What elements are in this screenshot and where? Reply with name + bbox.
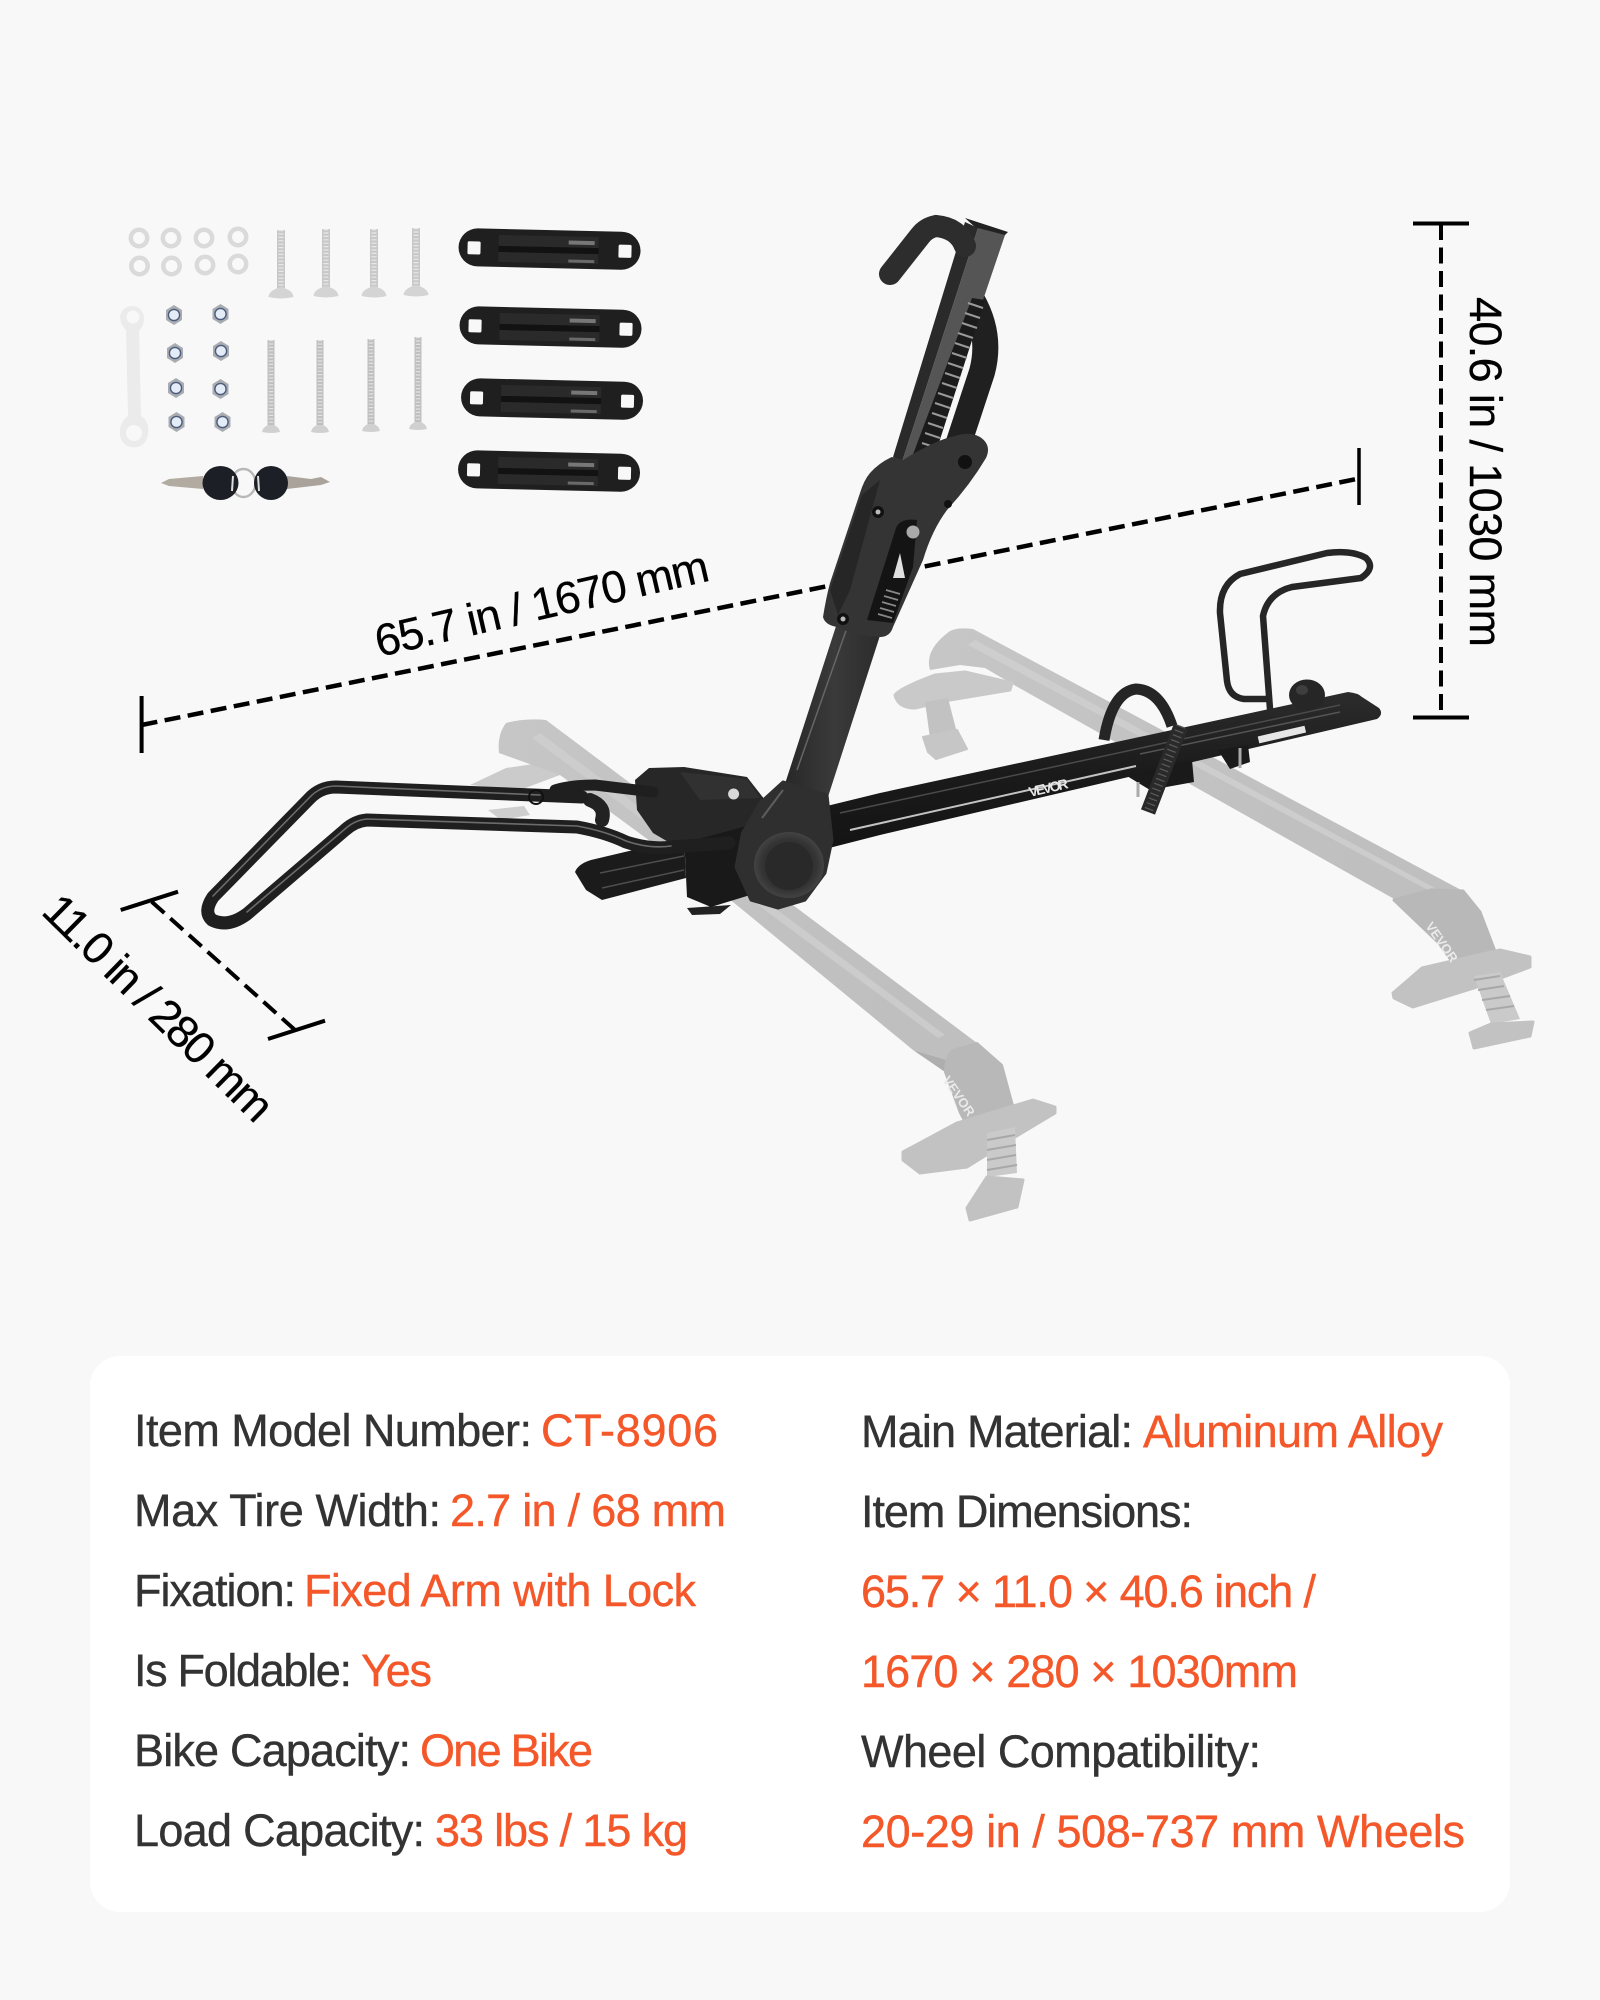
dimension: height: 40.6 in / 1030 mm bbox=[1460, 297, 1511, 647]
spec: wheel compatibility bbox=[861, 1726, 1465, 1857]
rack: rear wheel cradle bbox=[1220, 552, 1370, 718]
rack: main rail bbox=[790, 692, 1381, 858]
dimension: width: 11.0 in / 280 mm bbox=[33, 884, 284, 1132]
rack: wheel strap bbox=[1104, 689, 1181, 812]
rack: rear knob bbox=[1289, 680, 1325, 710]
spec: item dimensions: 1670 × 280 × 1030mm bbox=[861, 1646, 1298, 1697]
spec: item model number: CT-8906 bbox=[541, 1405, 718, 1456]
spec: max tire width: Max Tire Width: bbox=[134, 1485, 441, 1536]
rack: lower upright arm bbox=[783, 620, 885, 800]
spec: load capacity: 33 lbs / 15 kg bbox=[435, 1805, 688, 1856]
spec: wheel compatibility: Wheel Compatibility: bbox=[861, 1726, 1261, 1777]
spec: is foldable: Yes bbox=[361, 1645, 432, 1696]
spec: wheel compatibility: 20-29 in / 508-737 mm Wheels bbox=[861, 1806, 1465, 1857]
rack: upper ratchet arm bbox=[893, 218, 1008, 462]
accessories: washers bbox=[131, 229, 246, 274]
rack: handle behind upright bbox=[958, 300, 985, 445]
spec: bike capacity: Bike Capacity: bbox=[134, 1725, 411, 1776]
roof crossbar: rear (faded): VEVOR bbox=[1423, 919, 1461, 966]
spec: is foldable: Is Foldable: bbox=[134, 1645, 352, 1696]
spec: fixation bbox=[134, 1565, 696, 1616]
accessories: wrench bbox=[120, 306, 148, 447]
spec: bike capacity bbox=[134, 1725, 593, 1776]
dimension: overall length bbox=[142, 448, 1359, 753]
spec: main material bbox=[861, 1406, 1444, 1457]
rack: top hook bbox=[890, 226, 965, 274]
accessories: lock nuts bbox=[166, 304, 230, 432]
spec: fixation: Fixation: bbox=[134, 1565, 296, 1616]
rack: clamp body bbox=[635, 767, 770, 907]
spec: item dimensions bbox=[861, 1486, 1316, 1697]
rack: under-rail clamp bbox=[1127, 745, 1250, 797]
roof crossbar: front (faded): VEVOR bbox=[940, 1073, 978, 1120]
rack: front wheel cradle bbox=[208, 785, 729, 923]
spec: bike capacity: One Bike bbox=[420, 1725, 593, 1776]
spec: item dimensions: 65.7 × 11.0 × 40.6 inch / bbox=[861, 1566, 1316, 1617]
accessories: lock keys bbox=[161, 466, 330, 500]
dimension: overall length: 65.7 in / 1670 mm bbox=[370, 540, 714, 667]
spec: item model number bbox=[134, 1405, 718, 1456]
spec: max tire width bbox=[134, 1485, 726, 1536]
spec: main material: Main Material: bbox=[861, 1406, 1133, 1457]
roof crossbar: rear (faded) bbox=[895, 628, 1533, 1048]
spec card bbox=[90, 1356, 1510, 1912]
spec: item dimensions: Item Dimensions: bbox=[861, 1486, 1193, 1537]
accessories: long bolts bbox=[262, 337, 427, 433]
spec: max tire width: 2.7 in / 68 mm bbox=[450, 1485, 726, 1536]
spec: item model number: Item Model Number: bbox=[134, 1405, 532, 1456]
spec: load capacity bbox=[134, 1805, 688, 1856]
rack: front clamp jaw bbox=[575, 838, 731, 915]
rack: main rail: VEVOR bbox=[1027, 775, 1070, 800]
accessories: short bolts bbox=[268, 228, 428, 298]
spec: main material: Aluminum Alloy bbox=[1143, 1406, 1444, 1457]
rack: pivot housing and knob bbox=[736, 782, 832, 908]
spec: load capacity: Load Capacity: bbox=[134, 1805, 425, 1856]
roof crossbar: front (faded) bbox=[470, 719, 1055, 1220]
rack: locking head bbox=[823, 434, 988, 637]
spec: fixation: Fixed Arm with Lock bbox=[304, 1565, 696, 1616]
accessories: mounting plates bbox=[458, 228, 643, 492]
